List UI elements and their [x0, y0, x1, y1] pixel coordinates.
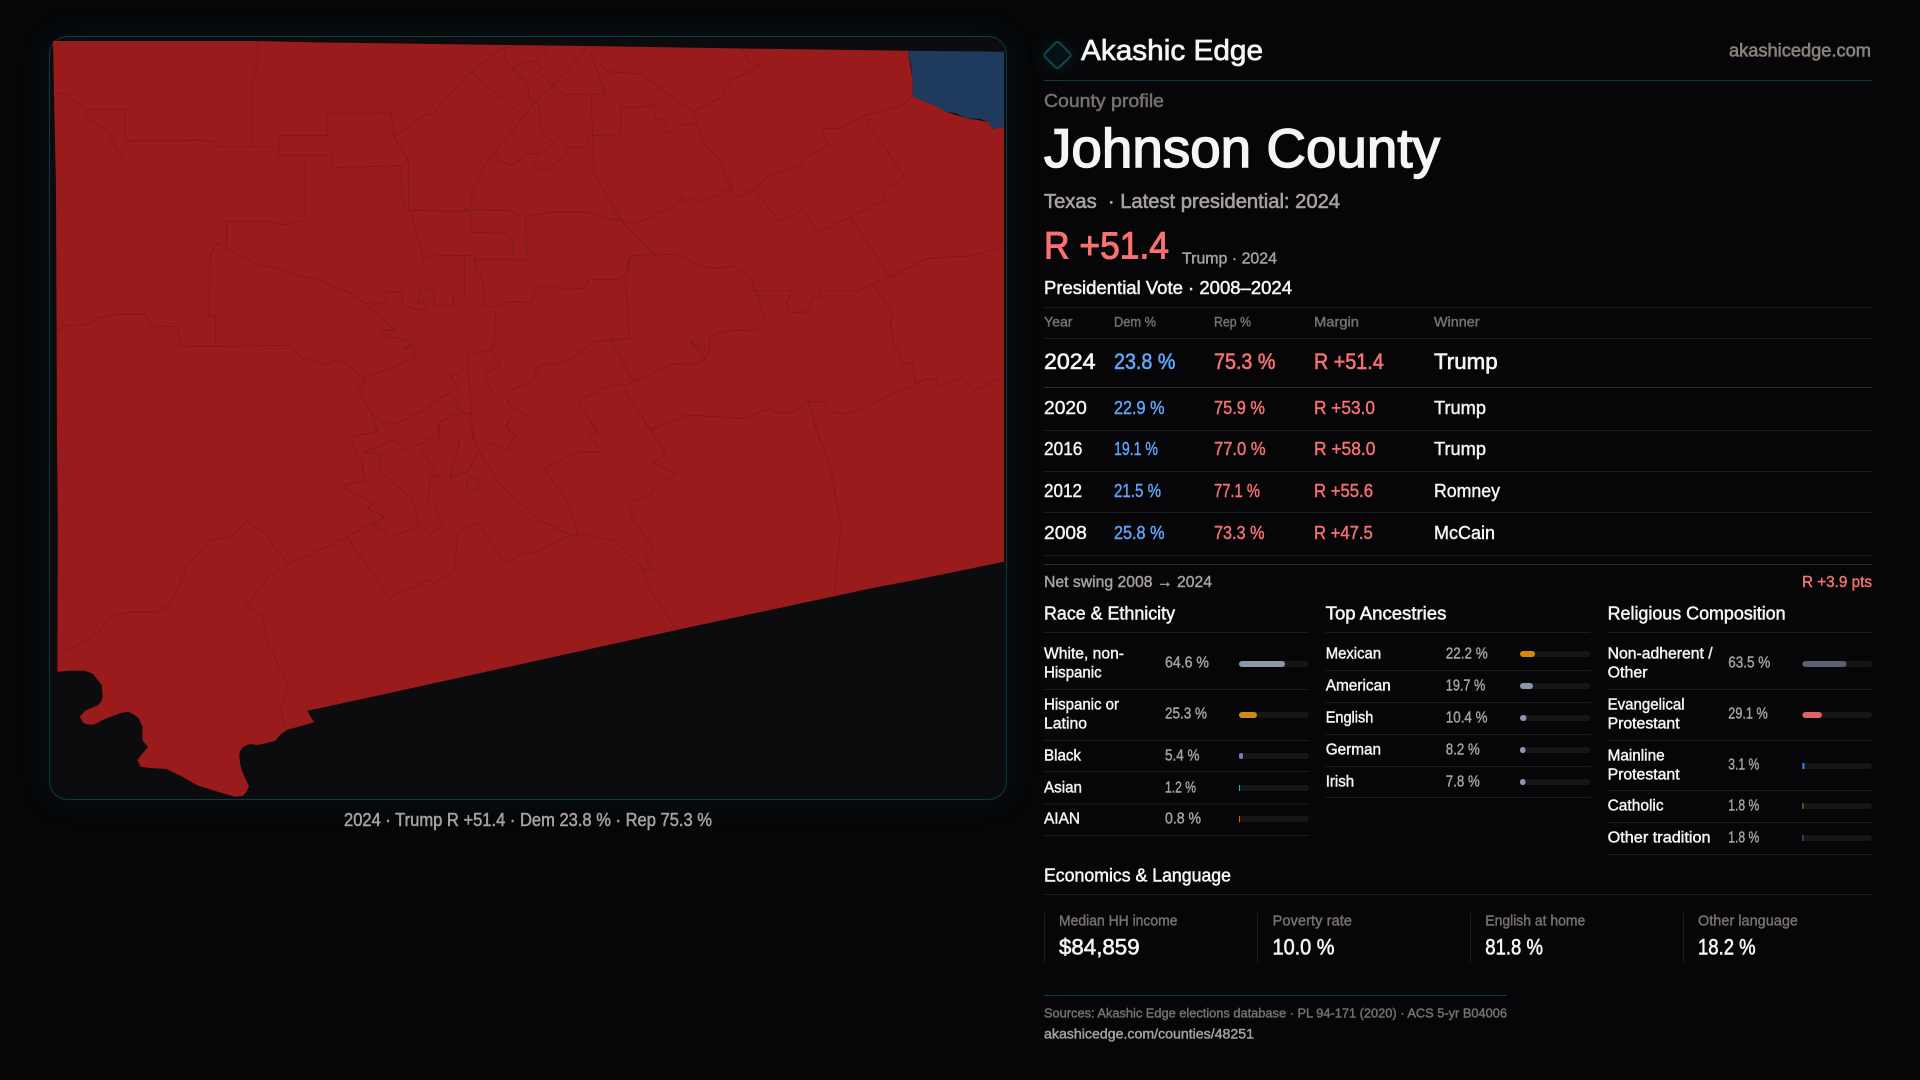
row 2008 — [1044, 523, 1495, 543]
row 2016: R +58.0 — [1314, 439, 1375, 459]
row 2024: 2024 — [1044, 349, 1096, 374]
row 2012: 2012 — [1044, 481, 1082, 501]
row: hispanic: Latino — [1044, 716, 1087, 732]
row: non-adherent: 63.5 % — [1728, 654, 1770, 672]
row 2020: 2020 — [1044, 398, 1087, 418]
stat: median income: Median HH income — [1059, 912, 1178, 930]
row 2024 — [1044, 349, 1498, 374]
stat: english at home: 81.8 % — [1485, 934, 1543, 960]
row: aian: 0.8 % — [1165, 810, 1201, 828]
row 2016: 19.1 % — [1114, 439, 1158, 459]
headline winner: Trump · 2024 — [1182, 250, 1277, 267]
row: non-adherent — [1608, 646, 1872, 682]
row: asian: 1.2 % — [1165, 780, 1196, 796]
panel: top ancestries — [1326, 604, 1591, 798]
row: catholic: Catholic — [1608, 798, 1664, 814]
row: mexican — [1326, 646, 1591, 662]
row: black: Black — [1044, 748, 1082, 764]
panel: religious composition — [1608, 604, 1872, 854]
row: white: Hispanic — [1044, 664, 1102, 682]
row: mainline: 3.1 % — [1728, 756, 1759, 774]
county url: akashicedge.com/counties/48251 — [1044, 1026, 1254, 1042]
vote table — [1044, 278, 1872, 556]
stat: english at home — [1470, 912, 1585, 962]
stat: english at home: English at home — [1485, 912, 1585, 930]
stat: other language: Other language — [1698, 912, 1798, 930]
footer — [1044, 996, 1507, 1042]
site url: akashicedge.com — [1729, 40, 1871, 60]
row: hispanic — [1044, 696, 1309, 732]
row 2020 — [1044, 398, 1486, 418]
title block — [1044, 91, 1440, 267]
brand name: Akashic Edge — [1081, 35, 1263, 67]
heading: Top Ancestries — [1326, 604, 1446, 624]
row: other tradition: Other tradition — [1608, 830, 1711, 846]
row 2008: 2008 — [1044, 523, 1087, 543]
map: Democratic precinct — [908, 51, 1004, 129]
row 2008: R +47.5 — [1314, 523, 1373, 543]
icon: diamond logo — [1043, 41, 1072, 69]
headline margin: R +51.4 — [1044, 225, 1169, 267]
county name: Johnson County — [1044, 117, 1440, 179]
row 2024: R +51.4 — [1314, 349, 1384, 374]
table header: Winner — [1434, 314, 1480, 330]
row: white: White, non- — [1044, 646, 1124, 662]
stat: median income: $84,859 — [1059, 934, 1140, 960]
stat: poverty: Poverty rate — [1272, 912, 1352, 930]
sources: Sources: Akashic Edge elections database · PL 94-171 (2020) · ACS 5-yr B04006 — [1044, 1006, 1507, 1020]
stat: median income — [1044, 912, 1178, 962]
row: american — [1326, 678, 1591, 694]
row: aian — [1044, 810, 1309, 828]
row: english: 10.4 % — [1446, 710, 1488, 726]
table header: Margin — [1314, 314, 1359, 330]
row: hispanic: 25.3 % — [1165, 706, 1207, 722]
net swing: Net swing 2008 → 2024 — [1044, 574, 1212, 591]
table title: Presidential Vote · 2008–2024 — [1044, 278, 1292, 298]
row: english — [1326, 710, 1591, 726]
row: mainline: Mainline — [1608, 748, 1665, 764]
row: evangelical — [1608, 696, 1872, 732]
row: german: German — [1326, 742, 1381, 758]
row: evangelical: 29.1 % — [1728, 706, 1768, 722]
row: aian: AIAN — [1044, 810, 1080, 828]
row: other tradition: 1.8 % — [1728, 830, 1759, 846]
row 2016: 2016 — [1044, 439, 1082, 459]
row 2012: 77.1 % — [1214, 481, 1260, 501]
row: asian — [1044, 780, 1309, 796]
stat: poverty — [1258, 912, 1352, 962]
row: irish — [1326, 774, 1591, 790]
table header — [1044, 314, 1480, 330]
row: english: English — [1326, 710, 1373, 726]
row 2016: 77.0 % — [1214, 439, 1266, 459]
row: american: 19.7 % — [1446, 678, 1485, 694]
row: catholic: 1.8 % — [1728, 798, 1759, 814]
row 2012: 21.5 % — [1114, 481, 1161, 501]
row 2012 — [1044, 481, 1500, 501]
row: mainline: Protestant — [1608, 766, 1680, 784]
row 2012: Romney — [1434, 481, 1500, 501]
heading: Race & Ethnicity — [1044, 604, 1175, 624]
row 2020: 75.9 % — [1214, 398, 1265, 418]
row: mainline — [1608, 748, 1872, 784]
table header: Year — [1044, 314, 1073, 330]
row: white: 64.6 % — [1165, 654, 1209, 672]
row 2008: 73.3 % — [1214, 523, 1264, 543]
heading: Economics & Language — [1044, 866, 1231, 886]
header: brand — [1043, 35, 1872, 80]
row: irish: Irish — [1326, 774, 1354, 790]
row: german — [1326, 742, 1591, 758]
row 2020: R +53.0 — [1314, 398, 1375, 418]
row: white — [1044, 646, 1309, 682]
row 2012: R +55.6 — [1314, 481, 1373, 501]
row: american: American — [1326, 678, 1391, 694]
row 2008: 25.8 % — [1114, 523, 1164, 543]
map caption: 2024 · Trump R +51.4 · Dem 23.8 % · Rep 75.3 % — [344, 810, 712, 830]
row: other tradition — [1608, 830, 1872, 846]
row 2024: 75.3 % — [1214, 349, 1275, 374]
panel: race and ethnicity — [1044, 604, 1309, 836]
row: non-adherent: Other — [1608, 664, 1648, 682]
row: non-adherent: Non-adherent / — [1608, 646, 1713, 662]
row: asian: Asian — [1044, 780, 1082, 796]
map: precinct boundaries — [56, 41, 1004, 728]
table header: Rep % — [1214, 314, 1251, 330]
net swing — [1044, 564, 1872, 591]
stat: other language: 18.2 % — [1698, 934, 1756, 960]
row: mexican: Mexican — [1326, 646, 1381, 662]
panel: economics and language — [1044, 866, 1872, 962]
row 2008: McCain — [1434, 523, 1495, 543]
row 2024: Trump — [1434, 349, 1498, 374]
row: catholic — [1608, 798, 1872, 814]
row 2016: Trump — [1434, 439, 1486, 459]
row: black: 5.4 % — [1165, 748, 1200, 764]
panel: county map — [49, 36, 1007, 800]
row: german: 8.2 % — [1446, 742, 1480, 758]
row: black — [1044, 748, 1309, 764]
heading: Religious Composition — [1608, 604, 1786, 624]
row 2016 — [1044, 439, 1486, 459]
eyebrow: County profile — [1044, 91, 1164, 111]
row: hispanic: Hispanic or — [1044, 696, 1120, 714]
row 2020: 22.9 % — [1114, 398, 1164, 418]
row: mexican: 22.2 % — [1446, 646, 1488, 662]
row 2020: Trump — [1434, 398, 1486, 418]
table header: Dem % — [1114, 314, 1156, 330]
row: evangelical: Protestant — [1608, 716, 1680, 732]
row 2024: 23.8 % — [1114, 349, 1175, 374]
net swing: R +3.9 pts — [1802, 574, 1872, 591]
stat: other language — [1684, 912, 1798, 962]
row: irish: 7.8 % — [1446, 774, 1480, 790]
stat: poverty: 10.0 % — [1272, 934, 1334, 960]
map: Republican precincts — [53, 41, 1004, 797]
subtitle: Texas · Latest presidential: 2024 — [1044, 190, 1340, 213]
row: evangelical: Evangelical — [1608, 696, 1685, 714]
